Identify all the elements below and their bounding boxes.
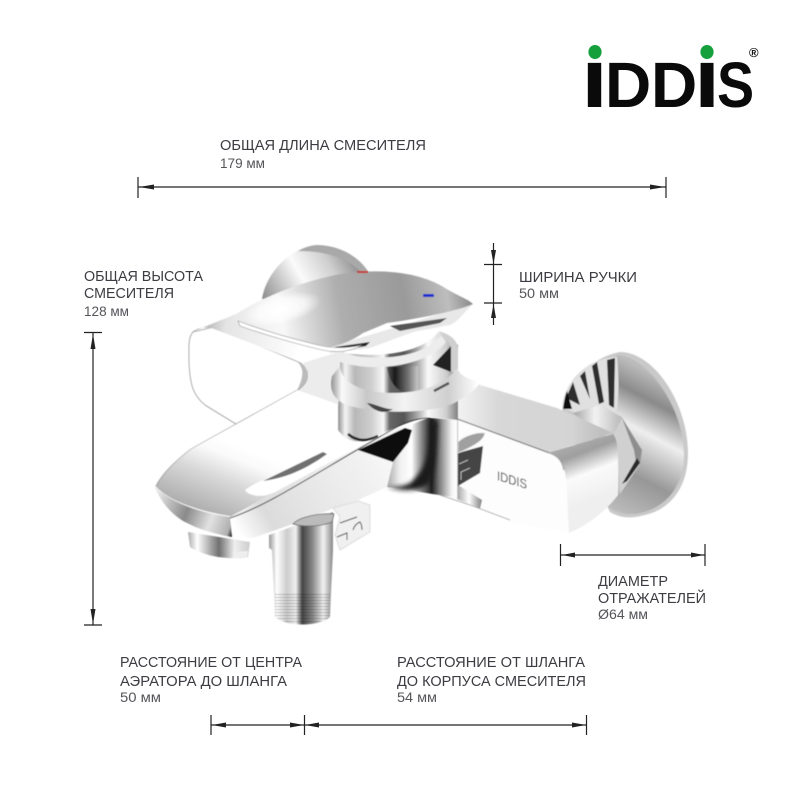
logo: IDDIS: ® — [749, 45, 759, 60]
heading: total height — [84, 268, 203, 319]
heading: aerator to hose: РАССТОЯНИЕ ОТ ЦЕНТРА — [120, 654, 302, 671]
aerator — [188, 532, 250, 558]
heading: hose to body — [397, 654, 586, 705]
heading: hose to body: 54 мм — [397, 689, 437, 705]
horizontal arm top face — [450, 376, 613, 453]
heading: total height: СМЕСИТЕЛЯ — [84, 285, 174, 302]
heading: handle width: ШИРИНА РУЧКИ — [519, 269, 637, 286]
logo: IDDIS: I — [695, 50, 720, 121]
body front face — [440, 417, 569, 533]
central column — [387, 418, 458, 498]
valve cylinder — [331, 331, 479, 442]
blue cold mark — [423, 294, 434, 297]
dimension arrow: total height — [84, 332, 102, 625]
rear wall disc behind handle — [262, 245, 369, 300]
logo: IDDIS: S — [717, 49, 754, 121]
heading: hose to body: РАССТОЯНИЕ ОТ ШЛАНГА — [397, 654, 585, 671]
wall flange — [562, 352, 688, 517]
small logo on body: IDDIS — [497, 468, 527, 492]
body right end band — [547, 434, 618, 533]
heading: handle width: 50 мм — [519, 285, 559, 301]
dimension arrows: bottom distances — [211, 715, 586, 735]
dimension arrow: handle width — [484, 243, 502, 325]
heading: aerator to hose: 50 мм — [120, 689, 161, 705]
dimension arrow: reflector diameter — [560, 544, 705, 566]
heading: reflector diameter — [598, 573, 706, 622]
heading: aerator to hose: АЭРАТОРА ДО ШЛАНГА — [120, 673, 287, 690]
logo: IDDIS: I — [582, 49, 607, 121]
heading: reflector diameter: ОТРАЖАТЕЛЕЙ — [598, 589, 706, 607]
logo: IDDIS: D — [605, 49, 651, 121]
lever handle — [233, 271, 473, 353]
faucet product image — [155, 245, 688, 624]
diverter ring recess — [457, 433, 485, 509]
heading: total length — [220, 137, 426, 171]
heading: total length: ОБЩАЯ ДЛИНА СМЕСИТЕЛЯ — [220, 137, 426, 154]
hex connector — [573, 405, 642, 494]
heading: reflector diameter: ДИАМЕТР — [598, 573, 668, 590]
dimension arrow: total length — [138, 177, 666, 198]
heading: total length: 179 мм — [220, 155, 265, 171]
heading: handle width — [519, 269, 637, 301]
heading: reflector diameter: Ø64 мм — [598, 606, 648, 622]
red hot mark — [357, 271, 368, 273]
heading: aerator to hose — [120, 654, 302, 705]
spout lower lobe — [230, 418, 430, 538]
logo: IDDIS — [582, 45, 759, 121]
spout top surface — [155, 390, 397, 537]
diverter clip — [333, 501, 370, 550]
hose connector — [269, 512, 334, 624]
heading: total height: 128 мм — [84, 303, 129, 319]
heading: total height: ОБЩАЯ ВЫСОТА — [84, 268, 203, 285]
rear body housing — [189, 314, 345, 424]
heading: hose to body: ДО КОРПУСА СМЕСИТЕЛЯ — [397, 673, 586, 690]
logo: IDDIS: D — [651, 49, 697, 121]
